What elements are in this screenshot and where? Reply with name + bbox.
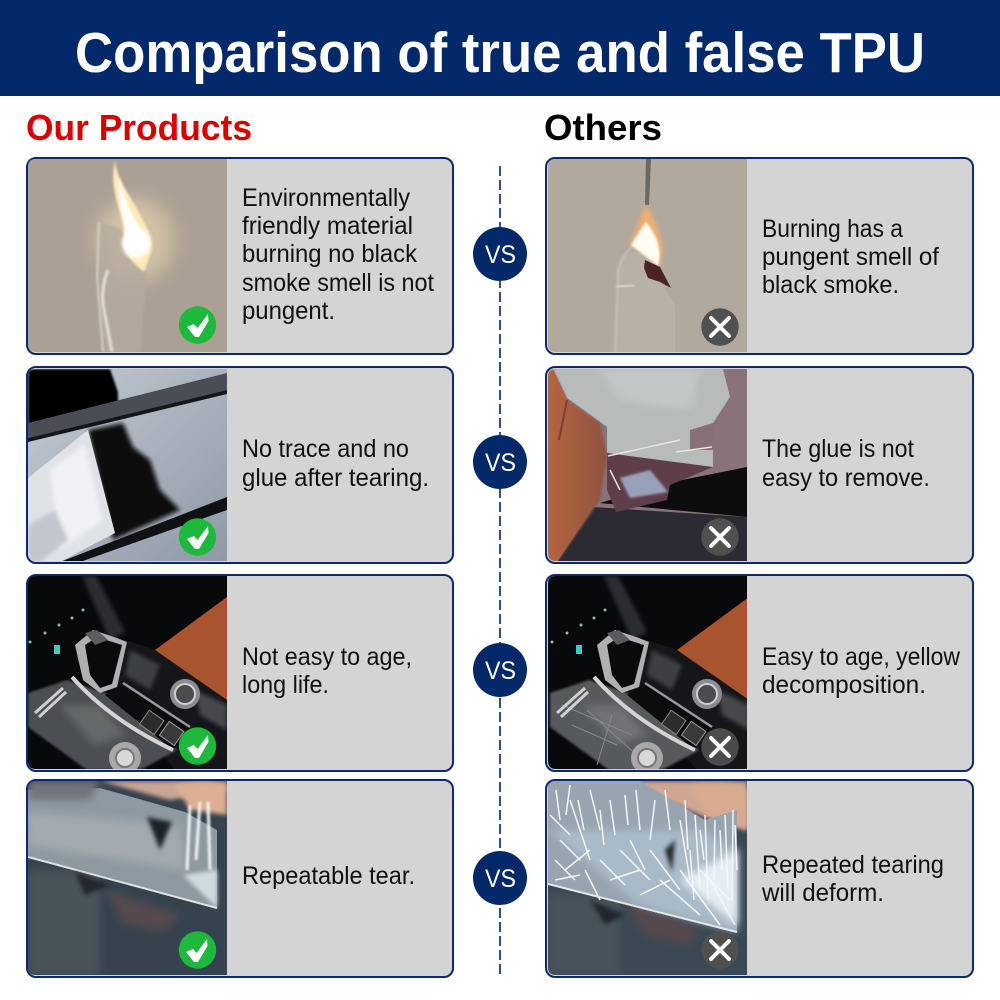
text: others burning: Burning has a <box>762 215 903 243</box>
heading: Others: Others <box>544 107 662 148</box>
text: ours burning: smoke smell is not <box>242 269 434 297</box>
text: others glue residue <box>762 435 930 492</box>
panel: ours, ageing <box>27 575 453 774</box>
text: ours tearing: glue after tearing. <box>242 464 429 492</box>
photo: car console with scratched film <box>548 576 749 774</box>
text: ours burning: friendly material <box>242 212 413 240</box>
VS badge 4 <box>473 851 527 905</box>
text: ours ageing: long life. <box>242 671 329 699</box>
icon: grey cross <box>701 931 739 969</box>
text: others deform: Repeated tearing <box>762 851 944 879</box>
photo: finger peeling film that leaves glue <box>548 369 747 562</box>
text: ours repeat tearing: Repeatable tear. <box>242 862 415 890</box>
icon: green check <box>179 518 216 556</box>
text: ours burning: burning no black <box>242 240 417 268</box>
text: ours burning: pungent. <box>242 297 335 325</box>
VS badge 2 <box>473 435 527 489</box>
panel: ours, repeat tearing <box>27 780 453 977</box>
text: others ageing: decomposition. <box>762 671 926 699</box>
text: ours ageing <box>242 643 412 699</box>
panel: others, ageing <box>546 575 973 774</box>
photo: clear film burning with a bright flame <box>28 159 227 352</box>
text: ours tearing: No trace and no <box>242 435 409 463</box>
heading: Our Products: Our Products <box>26 107 252 148</box>
text: others ageing: Easy to age, yellow <box>762 643 961 671</box>
icon: green check <box>179 931 216 969</box>
photo: film burning with a char edge <box>548 159 747 353</box>
text: ours burning <box>242 184 434 325</box>
icon: green check <box>179 727 216 765</box>
VS badge 3: VS <box>485 657 516 685</box>
panel: others, glue residue <box>546 367 973 563</box>
photo: smooth film pulled by fingers <box>28 781 227 975</box>
text: others deform <box>761 851 944 907</box>
VS badge 4: VS <box>485 865 516 893</box>
text: ours burning: Environmentally <box>242 184 410 212</box>
VS badge 3 <box>473 643 527 697</box>
text: others ageing <box>762 643 961 699</box>
title banner <box>0 0 1000 96</box>
icon: grey cross <box>701 308 739 346</box>
photo: car console with clean film <box>28 576 227 774</box>
photo: crinkled film pulled by fingers <box>548 781 747 975</box>
icon: grey cross <box>701 728 739 766</box>
text: others burning: pungent smell of <box>762 243 939 271</box>
panel: others, deform <box>546 780 973 977</box>
VS badge 2: VS <box>485 449 516 477</box>
panel: ours, tearing <box>27 367 453 563</box>
centre dashed divider <box>499 166 501 976</box>
VS badge 1: VS <box>485 241 516 269</box>
title banner: Comparison of true and false TPU <box>75 21 925 85</box>
text: others burning: black smoke. <box>762 271 899 299</box>
photo: film peeling cleanly off a glossy panel <box>28 369 227 562</box>
text: others burning <box>762 215 939 299</box>
text: ours tearing <box>242 435 429 492</box>
panel: others, burning <box>546 158 973 354</box>
text: others deform: will deform. <box>761 879 884 907</box>
text: others glue residue: easy to remove. <box>762 464 930 492</box>
text: ours ageing: Not easy to age, <box>242 643 412 671</box>
icon: green check <box>179 306 216 344</box>
icon: grey cross <box>701 518 739 556</box>
VS badge 1 <box>473 227 527 281</box>
panel: ours, burning <box>27 158 453 354</box>
text: others glue residue: The glue is not <box>762 435 914 463</box>
